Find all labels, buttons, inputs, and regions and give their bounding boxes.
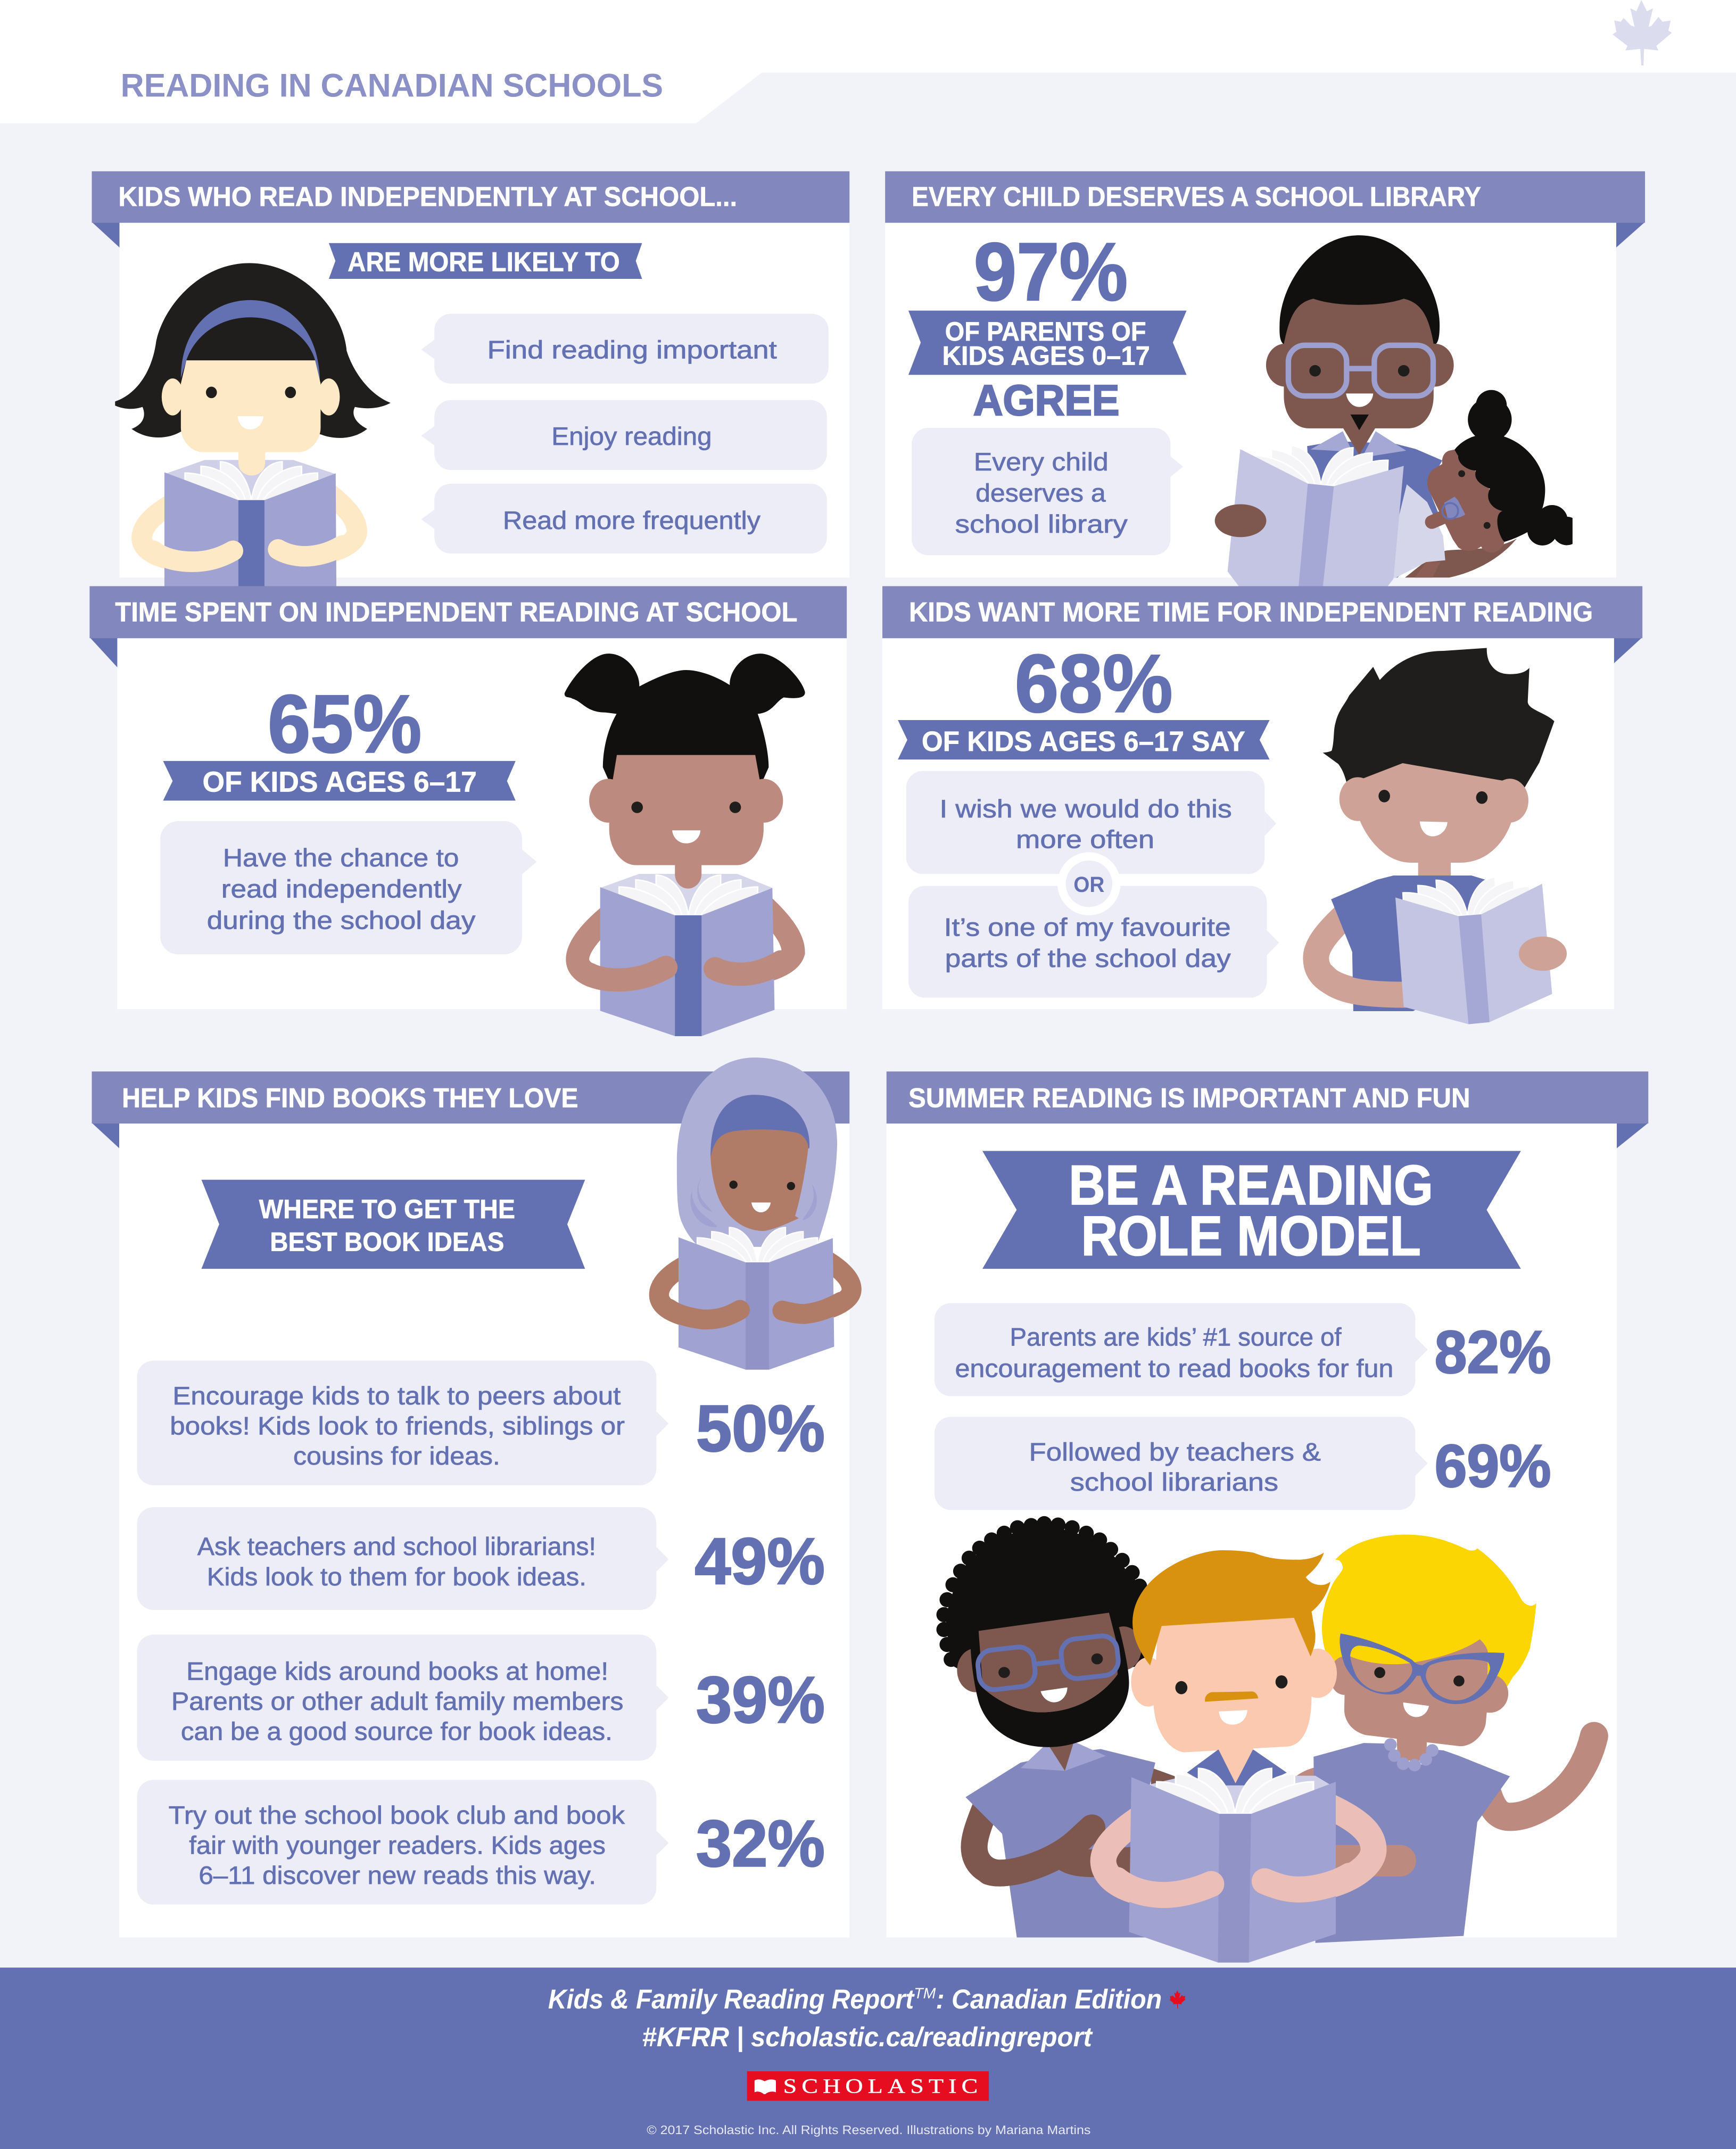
callout: book club and fair 32%: Try out the school book club and book [169, 1800, 626, 1829]
illustration: man with beard [944, 1524, 1233, 1937]
panel: time spent on independent reading [89, 586, 847, 1036]
panel heading: EVERY CHILD DESERVES A SCHOOL LIBRARY [912, 183, 1482, 213]
callout: I wish we would do this more often: I wish we would do this [939, 794, 1232, 823]
callout: every child deserves a school library: deserves a [976, 478, 1107, 507]
illustration: woman with yellow hair [1295, 1535, 1594, 1943]
panel heading: KIDS WANT MORE TIME FOR INDEPENDENT READING [909, 598, 1593, 628]
top white banner [0, 0, 1736, 123]
callout: chance to read independently: Have the chance to [223, 843, 459, 872]
ribbon: of kids ages 6-17 [163, 761, 516, 800]
callout: every child deserves a school library: school library [955, 509, 1129, 539]
callout: teachers and librarians 49%: Ask teachers and school librarians! [197, 1532, 596, 1560]
callout: talk to peers 50% [137, 1361, 668, 1485]
ribbon: where to get the best book ideas: WHERE TO GET THE [259, 1195, 515, 1225]
callout: every child deserves a school library: Every child [974, 447, 1109, 476]
panel heading: KIDS WHO READ INDEPENDENTLY AT SCHOOL... [118, 183, 737, 213]
callout: books at home 39%: Parents or other adult family members [171, 1687, 623, 1715]
ribbon: of parents [908, 311, 1187, 375]
callout: teachers and librarians 49%: Kids look to them for book ideas. [207, 1562, 586, 1591]
callout: talk to peers 50%: books! Kids look to friends, siblings or [170, 1411, 625, 1440]
panel heading [92, 171, 849, 223]
ribbon: be a reading role model: BE A READING [1069, 1154, 1433, 1217]
ribbon: be a reading role model [982, 1151, 1521, 1269]
callout: chance to read independently: read independently [221, 874, 463, 903]
illustration: girl with headband reading [115, 263, 391, 588]
footer report title: Kids & Family Reading Report [548, 1985, 915, 2015]
illustration: girl with buns reading [565, 654, 805, 1036]
callout: talk to peers 50%: Encourage kids to talk to peers about [172, 1381, 621, 1410]
copyright line: © 2017 Scholastic Inc. All Rights Reserved. Illustrations by Mariana Martins [647, 2123, 1092, 2137]
callout: read more frequently [421, 484, 827, 553]
callout: teachers and school librarians: school librarians [1070, 1467, 1278, 1496]
logo: scholastic [747, 2071, 989, 2101]
stat: 49%: 49% [695, 1526, 825, 1599]
ribbon: are more likely to: ARE MORE LIKELY TO [348, 248, 620, 278]
panel: kids who read independently [92, 171, 849, 588]
callout: parents number one source: Parents are kids’ #1 source of [1010, 1322, 1343, 1351]
illustration: boy with spiky hair reading [1316, 648, 1567, 1024]
illustration: father reading with baby [1215, 235, 1573, 588]
badge: or: OR [1073, 874, 1105, 897]
illustration: man with orange hair holding book [1103, 1550, 1374, 1963]
icon: red maple leaf [1169, 1990, 1186, 2009]
callout: book club and fair 32% [137, 1780, 668, 1905]
footer report title [548, 1985, 1162, 2015]
stat: 82%: 82% [1435, 1319, 1551, 1386]
callout: teachers and librarians 49% [137, 1507, 668, 1610]
ribbon: where to get the best book ideas [201, 1180, 585, 1269]
panel: kids want more time [882, 586, 1642, 1024]
callout: talk to peers 50%: cousins for ideas. [293, 1441, 500, 1470]
panel: help kids find books they love [92, 1057, 852, 1937]
ribbon: of kids ages 6-17: OF KIDS AGES 6–17 [203, 767, 477, 798]
panel heading [885, 171, 1645, 223]
icon: maple leaf [1613, 0, 1672, 65]
panel: every child deserves a school library [885, 171, 1645, 588]
ribbon: of parents: OF PARENTS OF [945, 317, 1146, 348]
callout: book club and fair 32%: fair with younger readers. Kids ages [189, 1831, 606, 1859]
callout: find reading important [421, 314, 829, 384]
callout: books at home 39% [137, 1634, 668, 1760]
callout: one of my favourite parts: It’s one of my favourite [944, 913, 1231, 941]
title: READING IN CANADIAN SCHOOLS [121, 68, 663, 105]
stat: 50%: 50% [696, 1393, 825, 1466]
ribbon: of kids ages 6-17 say: OF KIDS AGES 6–17 SAY [922, 726, 1246, 758]
callout: books at home 39%: Engage kids around books at home! [186, 1657, 608, 1685]
callout: I wish we would do this more often: more often [1016, 825, 1154, 854]
footer report title: : Canadian Edition [936, 1985, 1162, 2015]
callout: teachers and school librarians: Followed by teachers & [1029, 1437, 1322, 1466]
text: agree: AGREE [973, 375, 1119, 425]
callout: find reading important: Find reading important [487, 335, 777, 364]
stat: 39%: 39% [696, 1665, 825, 1738]
callout: every child deserves a school library [912, 428, 1183, 555]
callout: enjoy reading [421, 400, 827, 470]
callout: book club and fair 32%: 6–11 discover new reads this way. [199, 1861, 596, 1889]
panel heading [89, 586, 847, 638]
panel: summer reading is important and fun [887, 1071, 1648, 1963]
footer band [0, 1968, 1736, 2149]
panel heading [92, 1071, 849, 1123]
callout: enjoy reading: Enjoy reading [551, 421, 712, 451]
illustration: girl in hijab reading [659, 1057, 852, 1370]
panel heading: SUMMER READING IS IMPORTANT AND FUN [908, 1084, 1470, 1114]
ribbon: be a reading role model: ROLE MODEL [1081, 1204, 1421, 1268]
footer report title: TM [914, 1986, 937, 2003]
badge: or [1057, 852, 1120, 915]
callout: read more frequently: Read more frequently [503, 506, 762, 534]
footer hashtag and url: #KFRR | scholastic.ca/readingreport [642, 2023, 1094, 2053]
ribbon: where to get the best book ideas: BEST BOOK IDEAS [270, 1228, 504, 1258]
callout: parents number one source: encouragement to read books for fun [955, 1354, 1393, 1383]
stat: 97%: 97% [974, 226, 1128, 318]
ribbon: of parents: KIDS AGES 0–17 [943, 342, 1150, 371]
panel heading: HELP KIDS FIND BOOKS THEY LOVE [122, 1084, 578, 1114]
callout: parents number one source [935, 1303, 1428, 1396]
callout: books at home 39%: can be a good source for book ideas. [181, 1717, 613, 1746]
panel heading [882, 586, 1642, 638]
callout: chance to read independently [160, 821, 536, 954]
panel heading [887, 1071, 1648, 1123]
stat: 65%: 65% [268, 678, 421, 770]
callout: teachers and school librarians [935, 1417, 1428, 1510]
stat: 32%: 32% [696, 1808, 825, 1881]
stat: 69%: 69% [1435, 1433, 1551, 1500]
panel heading: TIME SPENT ON INDEPENDENT READING AT SCHOOL [115, 598, 797, 628]
callout: one of my favourite parts: parts of the school day [945, 944, 1232, 972]
callout: one of my favourite parts [908, 886, 1279, 998]
logo: scholastic: SCHOLASTIC [783, 2077, 982, 2098]
callout: I wish we would do this more often [906, 771, 1276, 874]
stat: 68%: 68% [1015, 638, 1173, 730]
callout: chance to read independently: during the school day [207, 906, 477, 935]
